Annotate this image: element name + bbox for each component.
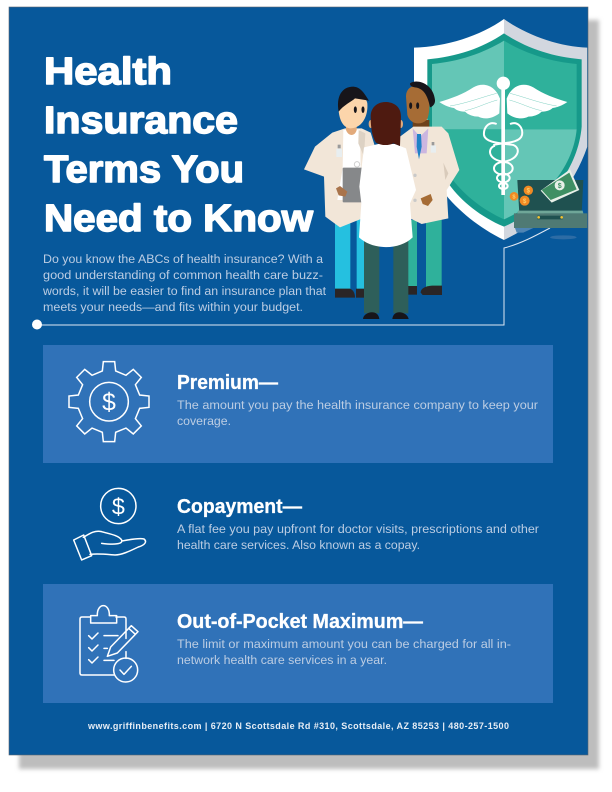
description: health care services. Also known as a copay. <box>177 538 420 552</box>
description <box>177 522 539 552</box>
caduceus <box>439 77 567 195</box>
heading: Out-of-Pocket Maximum— <box>177 611 423 633</box>
doctor: center, back view <box>359 102 416 319</box>
icon: gear with dollar: $ <box>102 389 116 416</box>
title: Health <box>44 51 172 93</box>
connector line <box>32 228 550 330</box>
description: A flat fee you pay upfront for doctor visits, prescriptions and other <box>177 522 539 536</box>
briefcase with money: $ <box>558 183 562 190</box>
heading: Premium— <box>177 372 278 394</box>
description <box>177 637 511 667</box>
illustration: shield, doctors, briefcase <box>304 19 587 319</box>
panel: premium <box>43 345 553 463</box>
intro text: meets your needs—and fits within your budget. <box>43 300 303 314</box>
heading: Copayment— <box>177 496 302 518</box>
briefcase with money <box>510 169 587 239</box>
title: Terms You <box>44 149 244 191</box>
shield <box>414 19 587 240</box>
panel: copayment <box>74 488 539 560</box>
intro text: good understanding of common health care buzz- <box>43 268 323 282</box>
title: Insurance <box>44 100 238 142</box>
footer contact line: www.griffinbenefits.com | 6720 N Scottsdale Rd #310, Scottsdale, AZ 85253 | 480-257-1500 <box>87 721 509 731</box>
description: The limit or maximum amount you can be charged for all in- <box>177 637 511 651</box>
icon: gear with dollar <box>69 362 149 442</box>
icon: hand with coin <box>74 488 146 560</box>
doctor: right <box>400 81 459 295</box>
briefcase with money: $ <box>523 199 527 205</box>
intro text: words, it will be easier to find an insurance plan that <box>42 284 327 298</box>
panel: out-of-pocket maximum <box>43 584 553 703</box>
icon: clipboard with checklist <box>80 606 138 682</box>
briefcase with money: $ <box>527 189 531 195</box>
briefcase with money: $ <box>512 195 516 201</box>
doctor: left <box>304 87 375 298</box>
intro text <box>42 252 327 314</box>
title <box>44 51 313 240</box>
description <box>177 398 538 428</box>
intro text: Do you know the ABCs of health insurance? With a <box>43 252 323 266</box>
icon: hand with coin: $ <box>112 494 125 520</box>
description: network health care services in a year. <box>177 653 387 667</box>
description: The amount you pay the health insurance company to keep your <box>177 398 538 412</box>
title: Need to Know <box>44 198 313 240</box>
description: coverage. <box>177 414 231 428</box>
